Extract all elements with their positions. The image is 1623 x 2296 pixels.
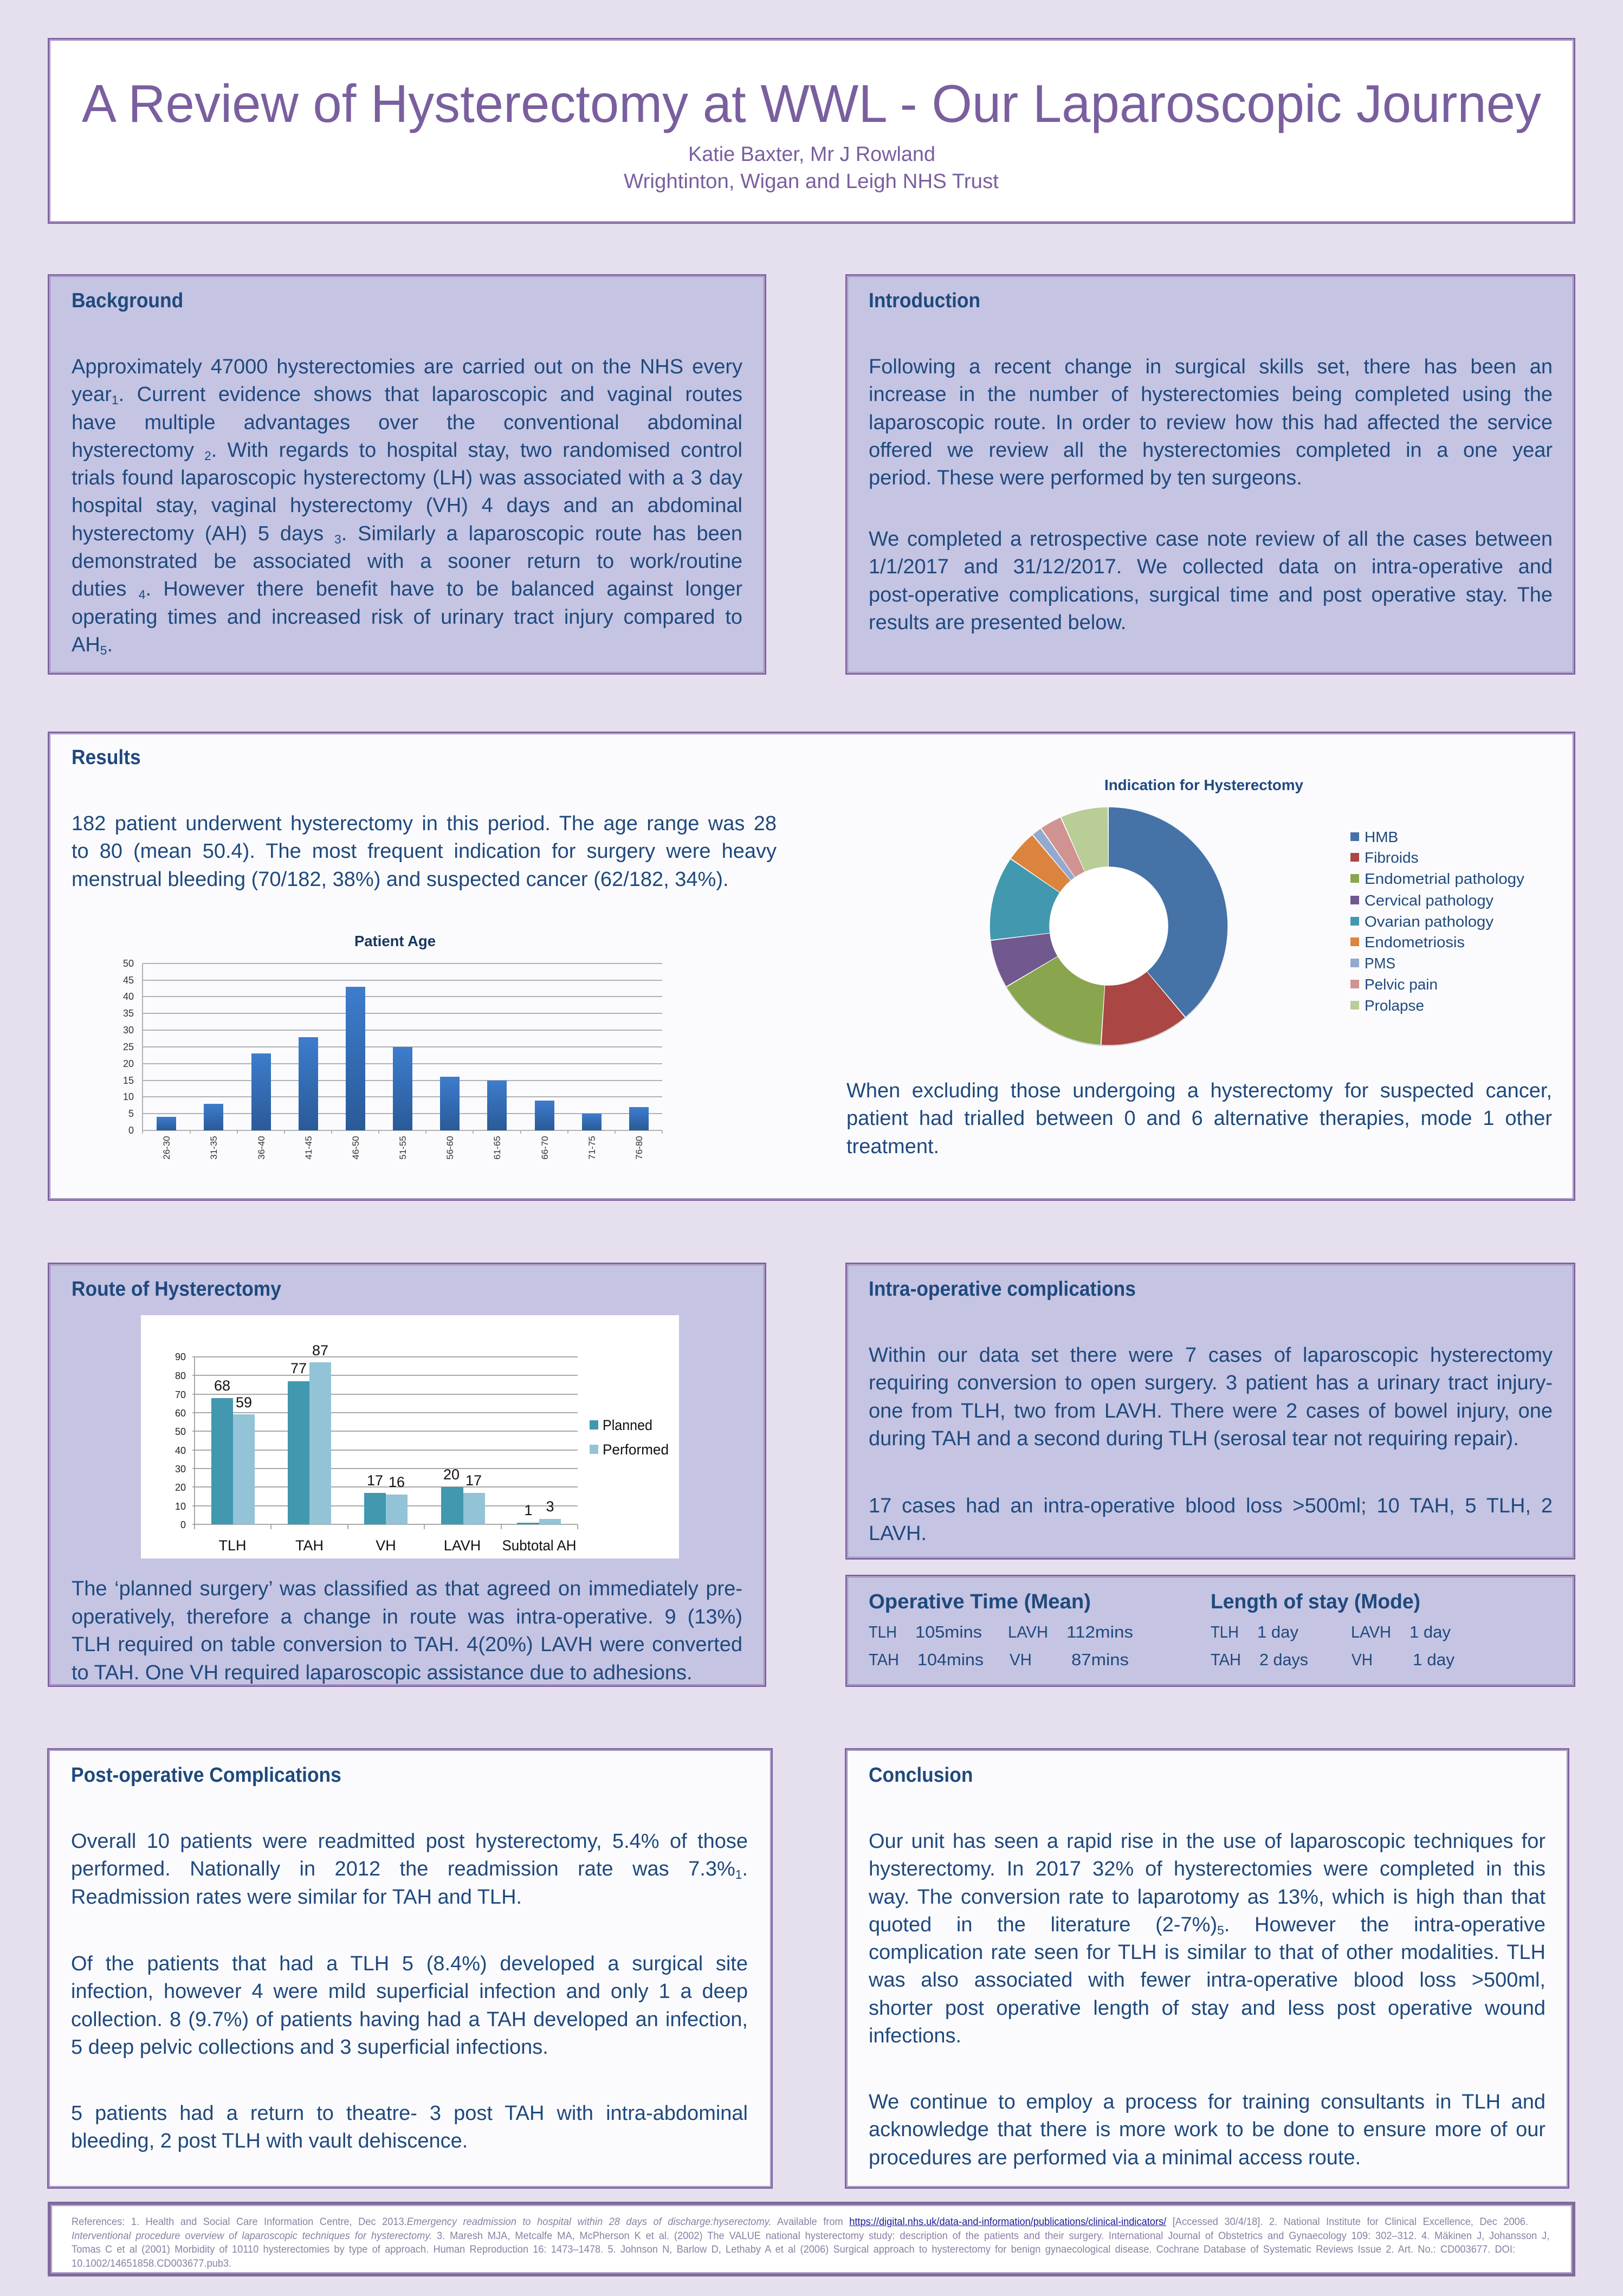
y axis labels: 0 [180, 1519, 186, 1530]
references text: Tomas C et al (2001) Morbidity of 10110 hysterectomies by type of approach. Human Reproduction 16: 1473–1478. 5. Johnson N, Barlow D, Lethaby A et al (2006) Surgical approach to hysterectomy for benign gynaecological disease. Cochrane Database of Systematic Reviews Issue 2. Art. No.: CD003677. DOI: [72, 2244, 1515, 2255]
y axis labels: 80 [175, 1370, 186, 1381]
introduction paragraph 1 [869, 355, 1553, 489]
x axis labels: 61-65 [492, 1136, 502, 1160]
conclusion paragraph 1: shorter post operative length of stay and less post operative wound [869, 1997, 1546, 2020]
introduction paragraph 1: period. These were performed by ten surgeons. [869, 467, 1302, 489]
title: A Review of Hysterectomy at WWL - Our Laparoscopic Journey [82, 74, 1541, 133]
x axis labels: 36-40 [256, 1136, 267, 1160]
therapies text: treatment. [846, 1135, 939, 1158]
y axis labels: 10 [175, 1501, 186, 1512]
legend: Fibroids [1365, 849, 1419, 866]
legend: Cervical pathology [1365, 892, 1493, 909]
operative time values: TLH [869, 1622, 897, 1641]
y axis labels: 60 [175, 1408, 186, 1419]
x axis labels [161, 1136, 644, 1160]
results text [72, 812, 777, 891]
title and authors [82, 74, 1541, 193]
y axis labels: 45 [123, 975, 134, 986]
data labels [214, 1342, 554, 1518]
length of stay values: VH [1352, 1650, 1373, 1669]
legend: HMB [1365, 829, 1398, 845]
post-operative paragraph 3: bleeding, 2 post TLH with vault dehiscence. [71, 2130, 468, 2152]
operative time values: 104mins [917, 1650, 984, 1669]
panel: route of hysterectomy [48, 1263, 766, 1687]
category labels: Subtotal AH [502, 1537, 577, 1554]
chart title: Patient Age [354, 933, 436, 949]
bar chart: patient age [123, 933, 663, 1160]
conclusion paragraph 1: quoted in the literature (2-7%)5. However the intra-operative [869, 1913, 1546, 1937]
results text: to 80 (mean 50.4). The most frequent indication for surgery were heavy [72, 840, 777, 863]
length of stay values: LAVH [1351, 1622, 1391, 1641]
y axis labels: 20 [123, 1058, 134, 1069]
x axis labels: 41-45 [303, 1136, 314, 1160]
conclusion paragraph 2: procedures are performed via a minimal access route. [869, 2146, 1361, 2169]
length of stay values [1211, 1622, 1454, 1669]
x axis labels: 26-30 [161, 1136, 172, 1160]
conclusion paragraph 1: complication rate seen for TLH is similar to that of other modalities. TLH [869, 1941, 1546, 1964]
background text: hysterectomy (AH) 5 days 3. Similarly a laparoscopic route has been [72, 522, 742, 546]
y axis labels: 25 [123, 1042, 134, 1052]
intra-operative paragraph 2: LAVH. [869, 1522, 927, 1545]
affiliation: Wrightinton, Wigan and Leigh NHS Trust [624, 170, 999, 193]
y axis labels: 10 [123, 1091, 134, 1102]
y axis labels: 70 [175, 1389, 186, 1400]
data labels: 17 [465, 1472, 482, 1489]
performed bars [233, 1362, 561, 1524]
y axis labels: 35 [123, 1008, 134, 1019]
conclusion paragraph 1: infections. [869, 2025, 961, 2047]
length of stay values: TLH [1211, 1622, 1239, 1641]
category labels [218, 1537, 577, 1554]
post-operative paragraph 1 [71, 1830, 748, 1909]
introduction paragraph 2 [869, 528, 1553, 634]
y axis labels: 30 [175, 1464, 186, 1474]
intra-operative paragraph 1: during TAH and a second during TLH (serosal tear not requiring repair). [869, 1427, 1519, 1450]
category labels: TLH [218, 1537, 247, 1554]
route text: The ‘planned surgery’ was classified as that agreed on immediately pre- [72, 1577, 742, 1600]
post-operative paragraph 2: infection, however 4 were mild superficial infection and only 1 a deep [71, 1980, 748, 2003]
panel: background [48, 274, 766, 675]
references text: Interventional procedure overview of laparoscopic techniques for hysterectomy. 3. Maresh MJA, Metcalfe MA, McPherson K et al. (2002) The VALUE national hysterectomy study: description of the patients and their surgery. International Journal of Obstetrics and Gynaecology 109: 302–312. 4. Mäkinen J, Johansson J, [72, 2230, 1549, 2242]
panel: references [48, 2202, 1575, 2276]
heading: intra-operative: Intra-operative complications [869, 1278, 1136, 1301]
heading: operative time: Operative Time (Mean) [869, 1590, 1091, 1613]
results text: menstrual bleeding (70/182, 38%) and suspected cancer (62/182, 34%). [72, 868, 729, 891]
category labels: TAH [295, 1537, 324, 1554]
y axis labels: 15 [123, 1075, 134, 1086]
y axis labels: 40 [175, 1445, 186, 1456]
y axis labels [123, 958, 134, 1136]
intra-operative paragraph 1: requiring conversion to open surgery. 3 patient has a urinary tract injury- [869, 1372, 1553, 1394]
background text: year1. Current evidence shows that laparoscopic and vaginal routes [72, 383, 742, 407]
conclusion paragraph 1: was also associated with fewer intra-operative blood loss >500ml, [869, 1969, 1546, 1991]
intra-operative paragraph 1 [869, 1344, 1553, 1450]
x axis labels: 71-75 [587, 1136, 597, 1160]
intra-operative paragraph 1: one from TLH, two from LAVH. There were 2 cases of bowel injury, one [869, 1400, 1553, 1422]
panel: operative time and length of stay [845, 1575, 1575, 1687]
panel: conclusion [845, 1748, 1569, 2189]
post-operative paragraph 2: Of the patients that had a TLH 5 (8.4%) developed a surgical site [71, 1952, 748, 1975]
planned bars [211, 1381, 539, 1524]
introduction paragraph 1: increase in the number of hysterectomies being completed using the [869, 383, 1553, 406]
conclusion paragraph 1 [869, 1830, 1546, 2047]
x axis labels: 56-60 [445, 1136, 455, 1160]
legend: Performed [603, 1441, 669, 1458]
bar chart: route planned vs performed [141, 1315, 679, 1558]
therapies text: When excluding those undergoing a hysterectomy for suspected cancer, [846, 1079, 1552, 1102]
background text: hospital stay, vaginal hysterectomy (VH) 4 days and an abdominal [72, 494, 742, 517]
length of stay values: TAH [1211, 1650, 1241, 1669]
legend: PMS [1365, 955, 1395, 972]
length of stay values: 1 day [1409, 1622, 1451, 1641]
panel: post-operative complications [47, 1748, 773, 2189]
operative time values: TAH [869, 1650, 899, 1669]
y axis labels: 50 [123, 958, 134, 969]
y axis labels: 90 [175, 1351, 186, 1362]
length of stay values: 2 days [1259, 1650, 1308, 1669]
data labels: 16 [389, 1474, 405, 1490]
legend [590, 1417, 669, 1458]
operative time values: 105mins [915, 1622, 982, 1641]
conclusion paragraph 1: Our unit has seen a rapid rise in the use of laparoscopic techniques for [869, 1830, 1546, 1853]
background text: AH5. [72, 633, 113, 657]
heading: results: Results [72, 746, 141, 769]
length of stay values: 1 day [1413, 1650, 1454, 1669]
data labels: 59 [236, 1394, 252, 1411]
panel: intra-operative complications [845, 1263, 1575, 1560]
introduction paragraph 1: offered we review all the hysterectomies completed in a one year [869, 439, 1553, 462]
heading: route: Route of Hysterectomy [72, 1278, 281, 1301]
panel: title header [48, 38, 1575, 224]
data labels: 1 [524, 1502, 533, 1518]
legend: Pelvic pain [1365, 976, 1438, 993]
results text: 182 patient underwent hysterectomy in this period. The age range was 28 [72, 812, 777, 835]
route text: operatively, therefore a change in route was intra-operative. 9 (13%) [72, 1605, 742, 1628]
bars [157, 987, 649, 1130]
background text: operating times and increased risk of urinary tract injury compared to [72, 606, 742, 629]
category labels: LAVH [444, 1537, 481, 1554]
conclusion paragraph 1: hysterectomy. In 2017 32% of hysterectomies were completed in this [869, 1858, 1546, 1880]
x axis labels: 76-80 [634, 1136, 644, 1160]
data labels: 77 [290, 1360, 307, 1376]
legend: Endometriosis [1365, 934, 1465, 950]
data labels: 87 [312, 1342, 328, 1359]
y axis labels: 40 [123, 991, 134, 1002]
x axis labels: 31-35 [209, 1136, 219, 1160]
conclusion paragraph 2 [869, 2091, 1546, 2169]
data labels: 17 [367, 1472, 383, 1489]
post-operative paragraph 1: performed. Nationally in 2012 the readmission rate was 7.3%1. [71, 1858, 748, 1881]
data labels: 20 [443, 1466, 460, 1483]
route text: to TAH. One VH required laparoscopic assistance due to adhesions. [72, 1661, 693, 1684]
background text: duties 4. However there benefit have to be balanced against longer [72, 578, 742, 602]
heading: conclusion: Conclusion [869, 1764, 973, 1787]
y axis labels [175, 1351, 186, 1530]
intra-operative paragraph 2 [869, 1495, 1553, 1545]
post-operative paragraph 1: Overall 10 patients were readmitted post hysterectomy, 5.4% of those [71, 1830, 748, 1853]
post-operative paragraph 2 [71, 1952, 748, 2059]
introduction paragraph 2: results are presented below. [869, 611, 1126, 634]
references text [72, 2215, 1549, 2271]
route text [72, 1577, 742, 1684]
heading: introduction: Introduction [869, 289, 980, 312]
authors: Katie Baxter, Mr J Rowland [688, 143, 935, 166]
category labels: VH [376, 1537, 396, 1554]
y axis labels: 0 [128, 1125, 134, 1136]
post-operative paragraph 1: Readmission rates were similar for TAH and TLH. [71, 1886, 522, 1909]
donut slices [983, 800, 1234, 1052]
background text: hysterectomy 2. With regards to hospital stay, two randomised control [72, 439, 742, 463]
data labels: 3 [546, 1498, 554, 1515]
legend: Ovarian pathology [1365, 913, 1493, 930]
heading: post-operative: Post-operative Complications [71, 1764, 341, 1787]
references text: 10.1002/14651858.CD003677.pub3. [72, 2258, 231, 2269]
y axis labels: 5 [128, 1108, 134, 1119]
background text [72, 355, 742, 657]
x axis labels: 66-70 [540, 1136, 550, 1160]
operative time values [869, 1622, 1133, 1669]
heading: length of stay: Length of stay (Mode) [1211, 1590, 1420, 1613]
introduction paragraph 2: post-operative complications, surgical time and post operative stay. The [869, 584, 1553, 606]
therapies text [846, 1079, 1552, 1158]
post-operative paragraph 2: 5 deep pelvic collections and 3 superficial infections. [71, 2036, 548, 2059]
background text: demonstrated be associated with a sooner return to work/routine [72, 550, 742, 573]
background text: trials found laparoscopic hysterectomy (LH) was associated with a 3 day [72, 467, 742, 489]
donut chart: indication for hysterectomy [990, 777, 1524, 1046]
operative statistics [869, 1590, 1454, 1669]
y axis labels: 30 [123, 1025, 134, 1036]
operative time values: 112mins [1066, 1622, 1133, 1641]
conclusion paragraph 1: way. The conversion rate to laparotomy as 13%, which is high than that [869, 1886, 1546, 1909]
background text: Approximately 47000 hysterectomies are carried out on the NHS every [72, 355, 742, 378]
x axis labels: 51-55 [398, 1136, 408, 1160]
legend: Prolapse [1365, 997, 1424, 1014]
post-operative paragraph 3 [71, 2102, 748, 2152]
panel: results [48, 732, 1575, 1201]
operative time values: 87mins [1071, 1650, 1129, 1669]
y axis labels: 50 [175, 1426, 186, 1437]
intra-operative paragraph 2: 17 cases had an intra-operative blood loss >500ml; 10 TAH, 5 TLH, 2 [869, 1495, 1553, 1517]
introduction paragraph 1: laparoscopic route. In order to review how this had affected the service [869, 411, 1553, 434]
data labels: 68 [214, 1377, 230, 1394]
intra-operative paragraph 1: Within our data set there were 7 cases of laparoscopic hysterectomy [869, 1344, 1553, 1367]
conclusion paragraph 2: We continue to employ a process for training consultants in TLH and [869, 2091, 1546, 2113]
chart title: Indication for Hysterectomy [1104, 777, 1303, 793]
operative time values: VH [1010, 1650, 1032, 1669]
introduction paragraph 2: We completed a retrospective case note review of all the cases between [869, 528, 1553, 551]
conclusion paragraph 2: acknowledge that there is more work to be done to ensure more of our [869, 2118, 1546, 2141]
introduction paragraph 1: Following a recent change in surgical skills set, there has been an [869, 355, 1553, 378]
legend: Planned [603, 1417, 652, 1433]
post-operative paragraph 3: 5 patients had a return to theatre- 3 post TAH with intra-abdominal [71, 2102, 748, 2125]
legend [1350, 829, 1524, 1014]
legend: Endometrial pathology [1365, 870, 1524, 887]
y axis labels: 20 [175, 1482, 186, 1493]
operative time values: LAVH [1008, 1622, 1048, 1641]
references text: References: 1. Health and Social Care Information Centre, Dec 2013.Emergency readmission to hospital within 28 days of discharge:hyserectomy. Available from https://digital.nhs.uk/data-and-information/publications/clinical-indicators/ [Accessed 30/4/18]. 2. National Institute for Clinical Excellence, Dec 2006. [72, 2216, 1528, 2228]
introduction paragraph 2: 1/1/2017 and 31/12/2017. We collected data on intra-operative and [869, 555, 1553, 578]
panel: introduction [845, 274, 1575, 675]
post-operative paragraph 2: collection. 8 (9.7%) of patients having had a TAH developed an infection, [71, 2008, 748, 2031]
therapies text: patient had trialled between 0 and 6 alternative therapies, mode 1 other [846, 1107, 1552, 1130]
length of stay values: 1 day [1257, 1622, 1298, 1641]
x axis labels: 46-50 [351, 1136, 361, 1160]
heading: background: Background [72, 289, 183, 312]
background text: have multiple advantages over the conventional abdominal [72, 411, 742, 434]
route text: TLH required on table conversion to TAH. 4(20%) LAVH were converted [72, 1633, 742, 1656]
